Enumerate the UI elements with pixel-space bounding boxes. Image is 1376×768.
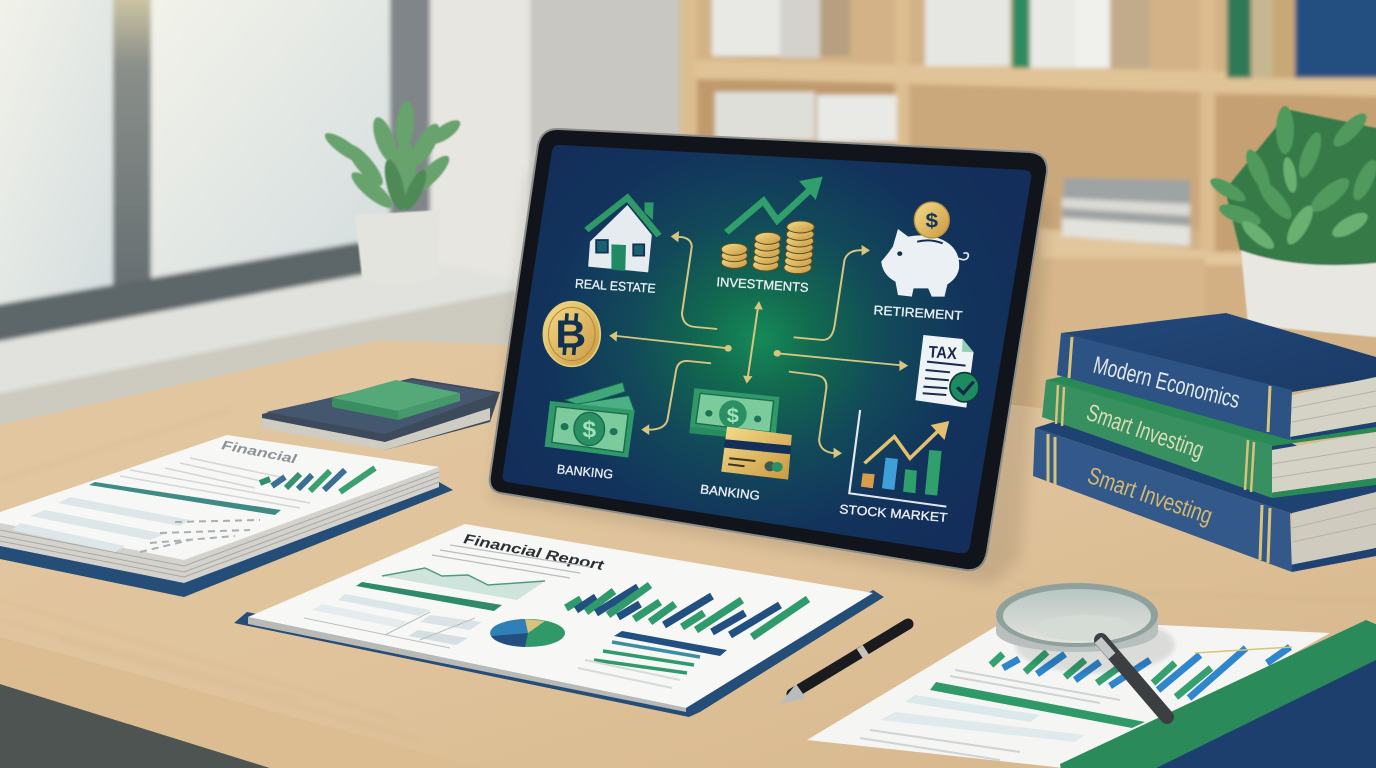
bookshelf xyxy=(680,0,1376,420)
pie chart xyxy=(490,619,565,647)
heading: Financial: Financial xyxy=(220,437,298,467)
book: Smart Investing bottom xyxy=(1033,400,1376,572)
document table xyxy=(860,670,1145,760)
icon: rising arrow and coins xyxy=(721,177,823,274)
centre financial report xyxy=(234,524,884,717)
book stack xyxy=(1033,313,1376,572)
book: Smart Investing bottom: Smart Investing xyxy=(1084,462,1216,530)
folder green and navy xyxy=(1060,620,1376,768)
horizontal bars xyxy=(578,631,727,688)
desk surface xyxy=(0,340,1376,768)
flow arrows xyxy=(609,231,908,458)
right document sheet xyxy=(807,618,1330,768)
icon: tax document: TAX xyxy=(928,342,958,363)
magnifying glass xyxy=(996,583,1175,717)
icon: tax document xyxy=(915,335,979,408)
icon: house xyxy=(586,198,659,272)
left report stack xyxy=(0,435,453,597)
icon: bitcoin coin xyxy=(543,302,600,366)
notebook with green sticky note xyxy=(262,378,500,450)
label: banking centre: BANKING xyxy=(699,482,761,503)
area chart xyxy=(382,568,545,600)
icon: piggy bank xyxy=(881,202,968,297)
label: investments: INVESTMENTS xyxy=(716,275,809,295)
mini table xyxy=(89,482,281,515)
icon: piggy bank: $ xyxy=(926,209,938,232)
tablet screen xyxy=(503,145,1031,553)
mini bar chart xyxy=(260,468,375,492)
book: Modern Economics top: Modern Economics xyxy=(1091,352,1243,414)
floor under desk xyxy=(0,684,270,768)
icon: banknotes: $ xyxy=(582,419,596,443)
icon: bitcoin coin: B xyxy=(555,312,586,356)
right potted plant xyxy=(1207,106,1376,338)
heading: Financial Report: Financial Report xyxy=(462,530,607,573)
book: Modern Economics top xyxy=(1057,313,1376,440)
label: retirement: RETIREMENT xyxy=(873,303,963,323)
book: Smart Investing middle xyxy=(1042,368,1376,498)
document bar chart xyxy=(991,647,1292,698)
pen xyxy=(780,624,908,704)
label: stock market: STOCK MARKET xyxy=(839,502,948,525)
label: banking left: BANKING xyxy=(556,462,614,482)
icon: banknote and credit card: $ xyxy=(727,405,739,427)
label: real estate: REAL ESTATE xyxy=(575,276,656,296)
data table xyxy=(304,582,502,648)
background wall and window xyxy=(0,0,690,450)
icon: banknotes xyxy=(545,382,635,458)
book: Smart Investing middle: Smart Investing xyxy=(1083,399,1207,464)
left potted plant xyxy=(321,100,464,284)
icon: stock chart xyxy=(849,410,949,507)
icon: banknote and credit card xyxy=(689,388,792,480)
tablet xyxy=(490,129,1050,585)
bar chart xyxy=(566,585,808,637)
